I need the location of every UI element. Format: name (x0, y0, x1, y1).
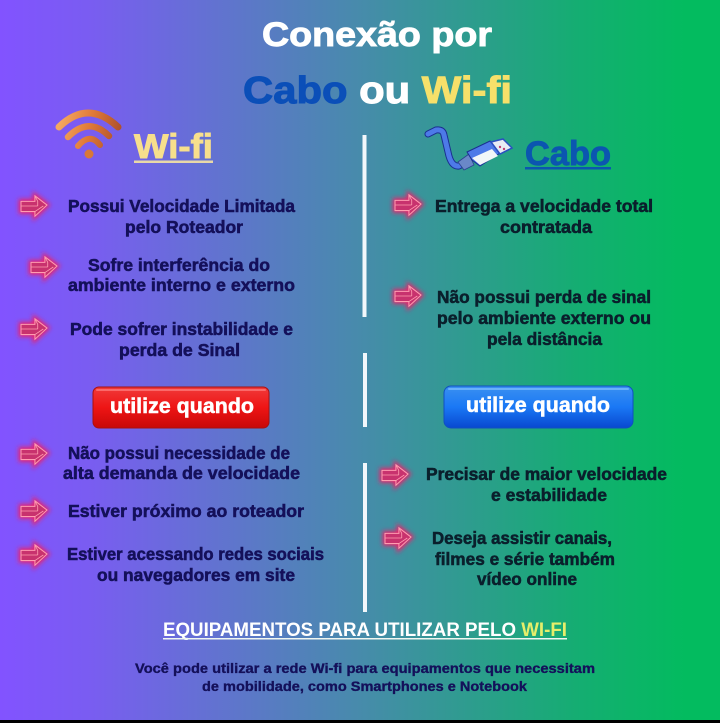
icon: arrow (31, 257, 57, 277)
text: low demand: Não possui necessidade de (68, 443, 290, 463)
panel: wi-fi heading (59, 113, 213, 166)
text: interference (68, 255, 295, 295)
text: interference: ambiente interno e externo (68, 275, 295, 295)
text: equipment note: de mobilidade, como Smartphones e Notebook (202, 678, 527, 694)
text: social networks (67, 544, 324, 585)
text: streaming: filmes e série também (435, 549, 615, 569)
text: full speed (435, 196, 653, 237)
text: limited speed (68, 196, 295, 237)
title: Cabo ou Wi-fi (243, 70, 512, 112)
icon: arrow (21, 501, 47, 521)
text: limited speed: Possui Velocidade Limitada (68, 196, 295, 216)
text: instability: Pode sofrer instabilidade e (70, 319, 293, 339)
panel: cabo heading (428, 130, 611, 173)
panel: wi-fi characteristics (21, 196, 295, 360)
text: instability (70, 319, 293, 360)
icon: arrow (395, 195, 421, 215)
text: no signal loss: pela distância (487, 329, 602, 349)
text: low demand: alta demanda de velocidade (63, 463, 300, 483)
text: more speed: e estabilidade (491, 485, 607, 505)
text: near the router: Estiver próximo ao roteador (68, 501, 304, 521)
text: no signal loss: Não possui perda de sinal (437, 287, 651, 307)
panel: cabo characteristics (395, 195, 653, 349)
text: streaming (432, 528, 615, 589)
text: limited speed: pelo Roteador (125, 217, 243, 237)
heading: equipment: EQUIPAMENTOS PARA UTILIZAR PELO WI-FI (163, 620, 567, 641)
button: utilize quando (cabo): utilize quando (466, 394, 610, 417)
panel: when to use wi-fi (21, 443, 324, 585)
text: streaming: Deseja assistir canais, (432, 528, 612, 548)
text: no signal loss: pelo ambiente externo ou (437, 308, 651, 328)
button: utilize quando (wi-fi) (93, 387, 269, 428)
icon: arrow (382, 465, 408, 485)
icon: arrow (21, 444, 47, 464)
text: full speed: Entrega a velocidade total (435, 196, 653, 216)
text: low demand (63, 443, 300, 483)
button: utilize quando (wi-fi): utilize quando (110, 395, 254, 418)
heading: Wi-fi: Wi-fi (134, 128, 213, 166)
divider (362, 135, 367, 612)
heading: Cabo: Cabo (525, 135, 611, 173)
title (243, 16, 512, 112)
icon: arrow (21, 545, 47, 565)
text: more speed: Precisar de maior velocidade (426, 464, 667, 484)
icon: cable (428, 130, 512, 170)
text: interference: Sofre interferência do (88, 255, 270, 275)
icon: arrow (21, 319, 47, 339)
text: social networks: ou navegadores em site (97, 565, 295, 585)
icon: arrow (395, 286, 421, 306)
text: equipment note: Você pode utilizar a rede Wi-fi para equipamentos que necessitam (135, 660, 595, 676)
panel: when to use cabo (382, 464, 667, 589)
button: utilize quando (cabo) (444, 386, 633, 428)
text: social networks: Estiver acessando redes sociais (67, 544, 324, 564)
text: more speed (426, 464, 667, 505)
icon: wi-fi signal (59, 113, 118, 157)
text: streaming: vídeo online (477, 569, 577, 589)
icon: arrow (21, 196, 47, 216)
title: Conexão por (262, 16, 492, 54)
text: equipment note (135, 660, 595, 694)
text: instability: perda de Sinal (119, 340, 240, 360)
text: full speed: contratada (500, 217, 592, 237)
text: no signal loss (437, 287, 651, 349)
icon: arrow (385, 528, 411, 548)
